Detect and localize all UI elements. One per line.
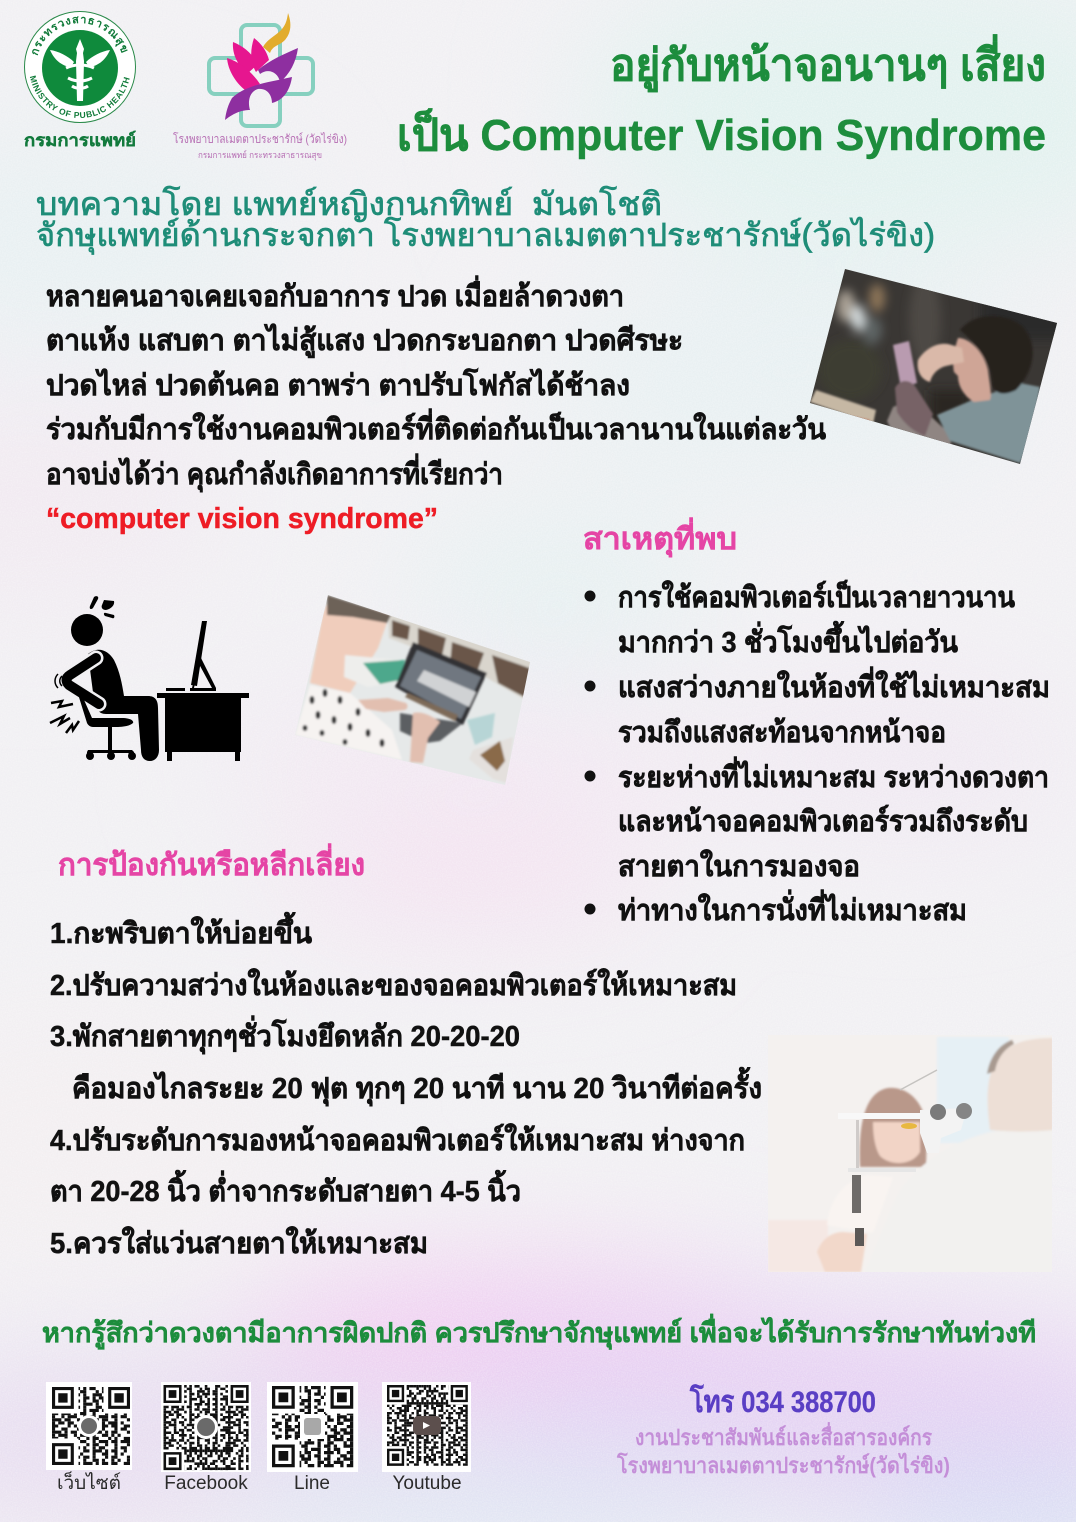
photo: woman rubbing eyes with phone — [810, 269, 1057, 464]
PR department credit: โรงพยาบาลเมตตาประชารักษ์(วัดไร่ขิง) — [616, 1452, 950, 1478]
QR labels: เว็บไซต์ — [57, 1470, 121, 1494]
list: causes — [584, 579, 1050, 927]
QR code: website — [46, 1382, 132, 1470]
list: causes: การใช้คอมพิวเตอร์เป็นเวลายาวนาน — [618, 579, 1015, 614]
list: causes: และหน้าจอคอมพิวเตอร์รวมถึงระดับ — [618, 804, 1028, 838]
QR labels: Youtube — [392, 1473, 462, 1494]
list: causes: แสงสว่างภายในห้องที่ใช้ไม่เหมาะสม — [618, 666, 1050, 704]
intro paragraph: อาจบ่งได้ว่า คุณกำลังเกิดอาการที่เรียกว่า — [46, 453, 503, 492]
logo: Metta Pracharak hospital — [173, 13, 347, 161]
QR labels: Facebook — [164, 1473, 248, 1494]
QR code: Line — [267, 1382, 358, 1472]
intro paragraph: หลายคนอาจเคยเจอกับอาการ ปวด เมื่อยล้าดวงตา — [46, 275, 624, 313]
list: prevention: 1.กะพริบตาให้บ่อยขึ้น — [50, 911, 312, 950]
intro paragraph: “computer vision syndrome” — [46, 503, 438, 535]
photo: woman working on laptop — [298, 595, 530, 785]
logo: Ministry of Public Health seal: MINISTRY OF PUBLIC HEALTH — [30, 76, 130, 118]
logo: Ministry of Public Health seal: กระทรวงสาธารณสุข — [32, 16, 128, 56]
QR code: Youtube — [345, 1343, 471, 1472]
list: causes: ท่าทางในการนั่งที่ไม่เหมาะสม — [618, 889, 967, 927]
logo: Metta Pracharak hospital: โรงพยาบาลเมตตาประชารักษ์ (วัดไร่ขิง) — [173, 132, 347, 146]
QR code: Facebook — [161, 1382, 292, 1514]
list: prevention: 5.ควรใส่แว่นสายตาให้เหมาะสม — [50, 1226, 428, 1260]
author byline: จักษุแพทย์ด้านกระจกตา โรงพยาบาลเมตตาประชารักษ์(วัดไร่ขิง) — [36, 217, 935, 255]
intro paragraph: ร่วมกับมีการใช้งานคอมพิวเตอร์ที่ติดต่อกันเป็นเวลานานในแต่ละวัน — [46, 408, 826, 446]
list: prevention: 3.พักสายตาทุกๆชั่วโมงยึดหลัก 20-20-20 — [50, 1015, 520, 1054]
list: causes: รวมถึงแสงสะท้อนจากหน้าจอ — [618, 717, 946, 749]
call to action: หากรู้สึกว่าดวงตามีอาการผิดปกติ ควรปรึกษาจักษุแพทย์ เพื่อจะได้รับการรักษาทันท่วงที — [42, 1313, 1036, 1350]
logo: Ministry of Public Health seal: กรมการแพทย์ — [24, 130, 136, 150]
contact phone: โทร 034 388700 — [689, 1383, 876, 1419]
title: เป็น Computer Vision Syndrome — [397, 108, 1046, 160]
author byline: บทความโดย แพทย์หญิงกนกทิพย์ มันตโชติ — [36, 186, 662, 222]
author byline — [36, 186, 935, 255]
PR department credit: งานประชาสัมพันธ์และสื่อสารองค์กร — [635, 1421, 932, 1450]
icon: person with back pain at desk — [50, 596, 249, 761]
list: prevention — [50, 911, 762, 1260]
title: อยู่กับหน้าจอนานๆ เสี่ยง — [610, 34, 1046, 92]
list: prevention: คือมองไกลระยะ 20 ฟุต ทุกๆ 20 นาที นาน 20 วินาทีต่อครั้ง — [72, 1066, 762, 1106]
logo: Metta Pracharak hospital: กรมการแพทย์ กระทรวงสาธารณสุข — [198, 149, 322, 161]
list: causes: สายตาในการมองจอ — [618, 849, 860, 883]
QR labels: Line — [294, 1473, 330, 1494]
heading: causes: สาเหตุที่พบ — [583, 517, 737, 558]
QR labels — [57, 1470, 462, 1494]
logo: Ministry of Public Health seal — [24, 11, 136, 150]
intro paragraph — [46, 275, 826, 535]
list: causes: มากกว่า 3 ชั่วโมงขึ้นไปต่อวัน — [618, 620, 958, 659]
PR department credit — [616, 1421, 950, 1478]
title — [397, 34, 1046, 160]
list: prevention: 4.ปรับระดับการมองหน้าจอคอมพิวเตอร์ให้เหมาะสม ห่างจาก — [50, 1123, 745, 1157]
list: prevention: ตา 20-28 นิ้ว ต่ำจากระดับสายตา 4-5 นิ้ว — [50, 1169, 521, 1208]
intro paragraph: ตาแห้ง แสบตา ตาไม่สู้แสง ปวดกระบอกตา ปวดศีรษะ — [46, 323, 683, 358]
intro paragraph: ปวดไหล่ ปวดต้นคอ ตาพร่า ตาปรับโฟกัสได้ช้าลง — [46, 367, 630, 402]
photo: eye examination, faded — [768, 1035, 1053, 1272]
heading: prevention: การป้องกันหรือหลีกเลี่ยง — [58, 843, 365, 882]
list: prevention: 2.ปรับความสว่างในห้องและของจอคอมพิวเตอร์ให้เหมาะสม — [50, 968, 737, 1002]
